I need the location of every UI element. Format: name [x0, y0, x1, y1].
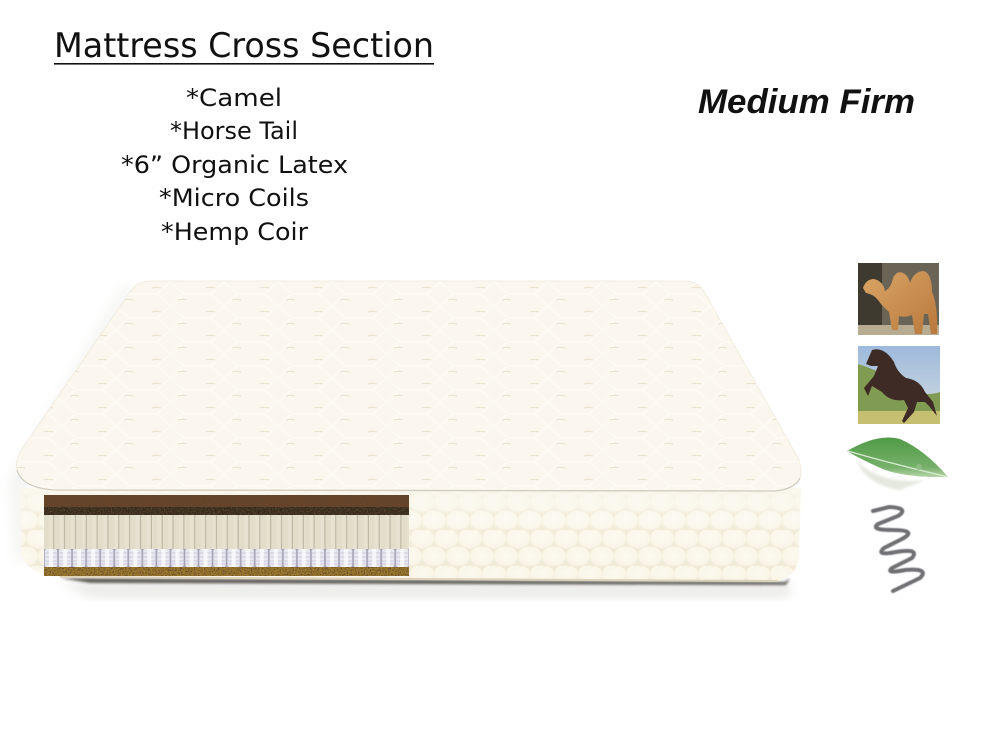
firmness label: Medium Firm [698, 83, 915, 121]
soft glow shadow on the left of the mattress [8, 285, 135, 560]
hemp coir top layer [44, 495, 409, 515]
layer list [121, 84, 348, 246]
layer list: *Hemp Coir [161, 218, 308, 246]
layer list: *6” Organic Latex [121, 151, 348, 179]
mattress illustration [8, 281, 801, 598]
icon: latex leaf [847, 438, 948, 490]
mattress top surface [17, 281, 801, 491]
floor shadow [60, 582, 790, 598]
title: Mattress Cross Section [54, 26, 434, 66]
icon: coil spring [873, 507, 923, 591]
icon: camel [858, 263, 939, 335]
cutaway cross section [44, 495, 409, 576]
layer list: *Horse Tail [170, 117, 298, 145]
bottom coir layer [44, 567, 409, 576]
layer list: *Camel [186, 84, 282, 112]
icon: horse [858, 346, 940, 424]
mattress side panel [20, 488, 801, 581]
micro coils layer [44, 549, 409, 567]
layer list: *Micro Coils [159, 184, 309, 212]
latex layer [44, 515, 409, 549]
